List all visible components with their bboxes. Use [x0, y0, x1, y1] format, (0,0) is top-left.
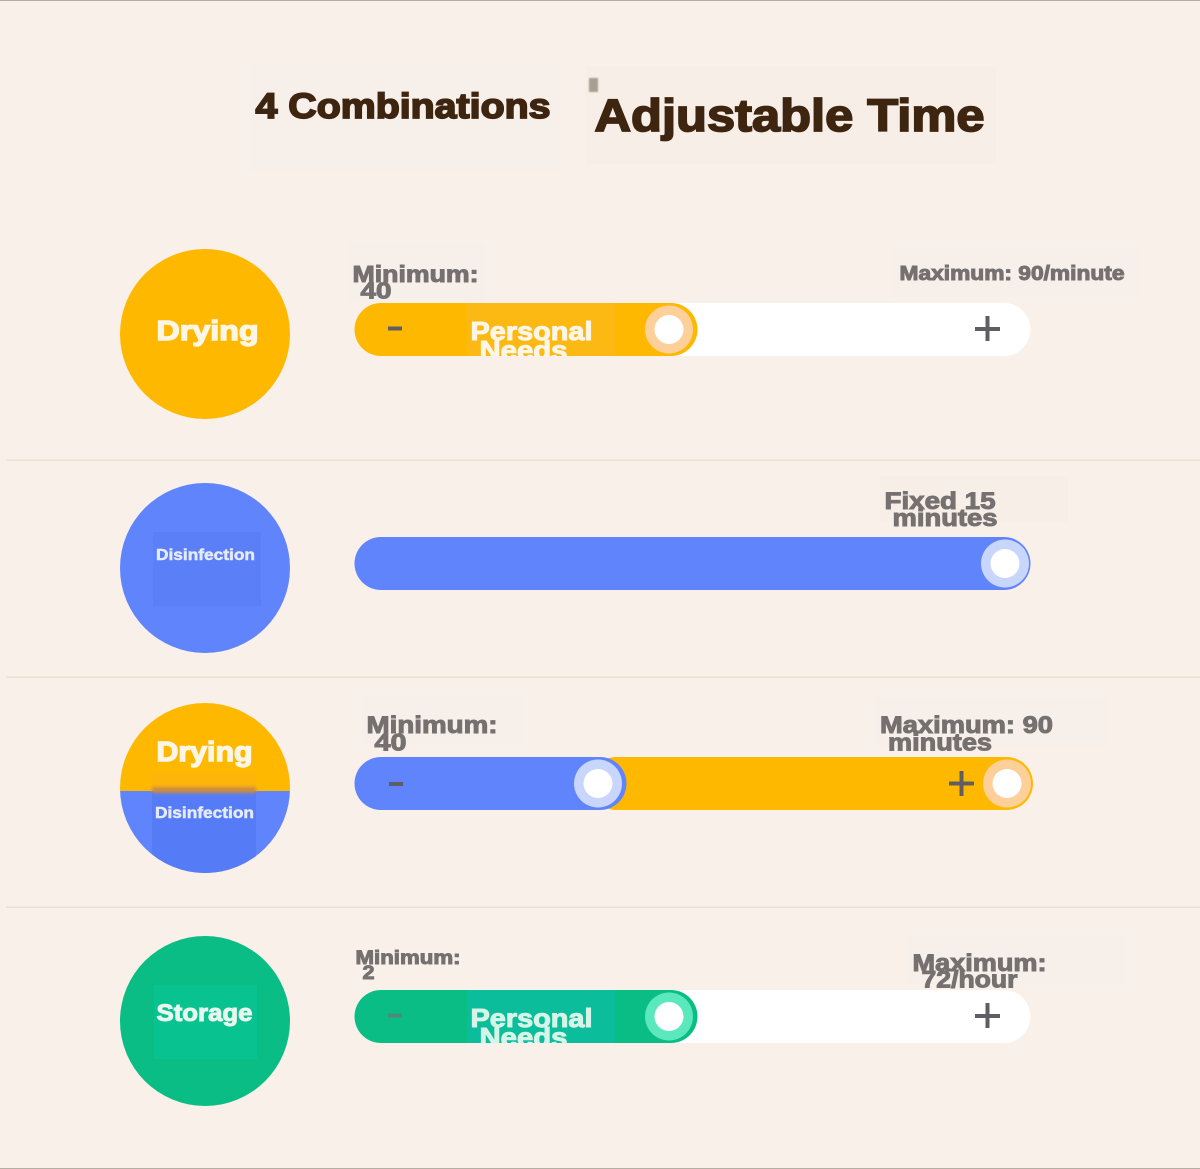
icon: disinfection circle: Disinfection [156, 547, 255, 564]
label: minimum 40: Minimum: [366, 712, 498, 739]
label: maximum 90 minutes: Maximum: 90 [880, 712, 1053, 739]
slider: drying time: Needs [480, 335, 568, 365]
label: minimum 2: Minimum: [356, 947, 460, 969]
icon: drying circle [120, 249, 290, 419]
panel: drying row [120, 243, 1138, 419]
label: minimum 2 [356, 947, 460, 984]
icon: split circle [120, 703, 290, 876]
label: minimum 40 [362, 697, 524, 756]
label: minimum 40 [350, 243, 486, 304]
icon: split circle: Disinfection [155, 805, 254, 822]
label: maximum 90 per minute: Maximum: 90/minute [900, 263, 1124, 285]
title: 4 Combinations [249, 64, 560, 170]
slider: drying time: Personal [470, 316, 592, 346]
label: maximum 72 per hour [907, 936, 1127, 994]
panel: storage row [120, 936, 1127, 1106]
label: minimum 40: 40 [360, 278, 392, 304]
title: Adjustable Time [586, 67, 996, 164]
label: maximum 72 per hour: Maximum: [912, 950, 1046, 977]
label: maximum 72 per hour: 72/hour [922, 966, 1018, 994]
slider: storage time [354, 990, 1030, 1043]
label: fixed 15 minutes: minutes [892, 505, 998, 532]
icon: disinfection circle [120, 483, 290, 653]
icon: storage circle [120, 936, 290, 1106]
label: minimum 40: 40 [374, 730, 406, 756]
title: 4 Combinations: 4 Combinations [256, 87, 550, 126]
slider: storage time: Needs [480, 1022, 568, 1052]
slider: drying time [354, 303, 1030, 356]
icon: storage circle: Storage [156, 1000, 252, 1027]
title: Adjustable Time: Adjustable Time [594, 90, 984, 141]
slider: combined time [354, 757, 1033, 810]
panel: drying plus disinfection row [120, 703, 1052, 873]
label: maximum 90 per minute [893, 249, 1138, 297]
label: minimum 40: Minimum: [352, 261, 478, 287]
panel: disinfection row [120, 476, 1068, 653]
label: fixed 15 minutes: Fixed 15 [884, 488, 996, 515]
label: fixed 15 minutes [880, 476, 1068, 532]
label: maximum 90 minutes [874, 698, 1106, 756]
icon: drying circle: Drying [156, 315, 258, 346]
slider: disinfection time [354, 537, 1030, 590]
label: minimum 2: 2 [362, 962, 375, 984]
slider: storage time: Personal [470, 1003, 592, 1033]
icon: split circle: Drying [156, 736, 252, 767]
label: maximum 90 minutes: minutes [888, 730, 992, 756]
